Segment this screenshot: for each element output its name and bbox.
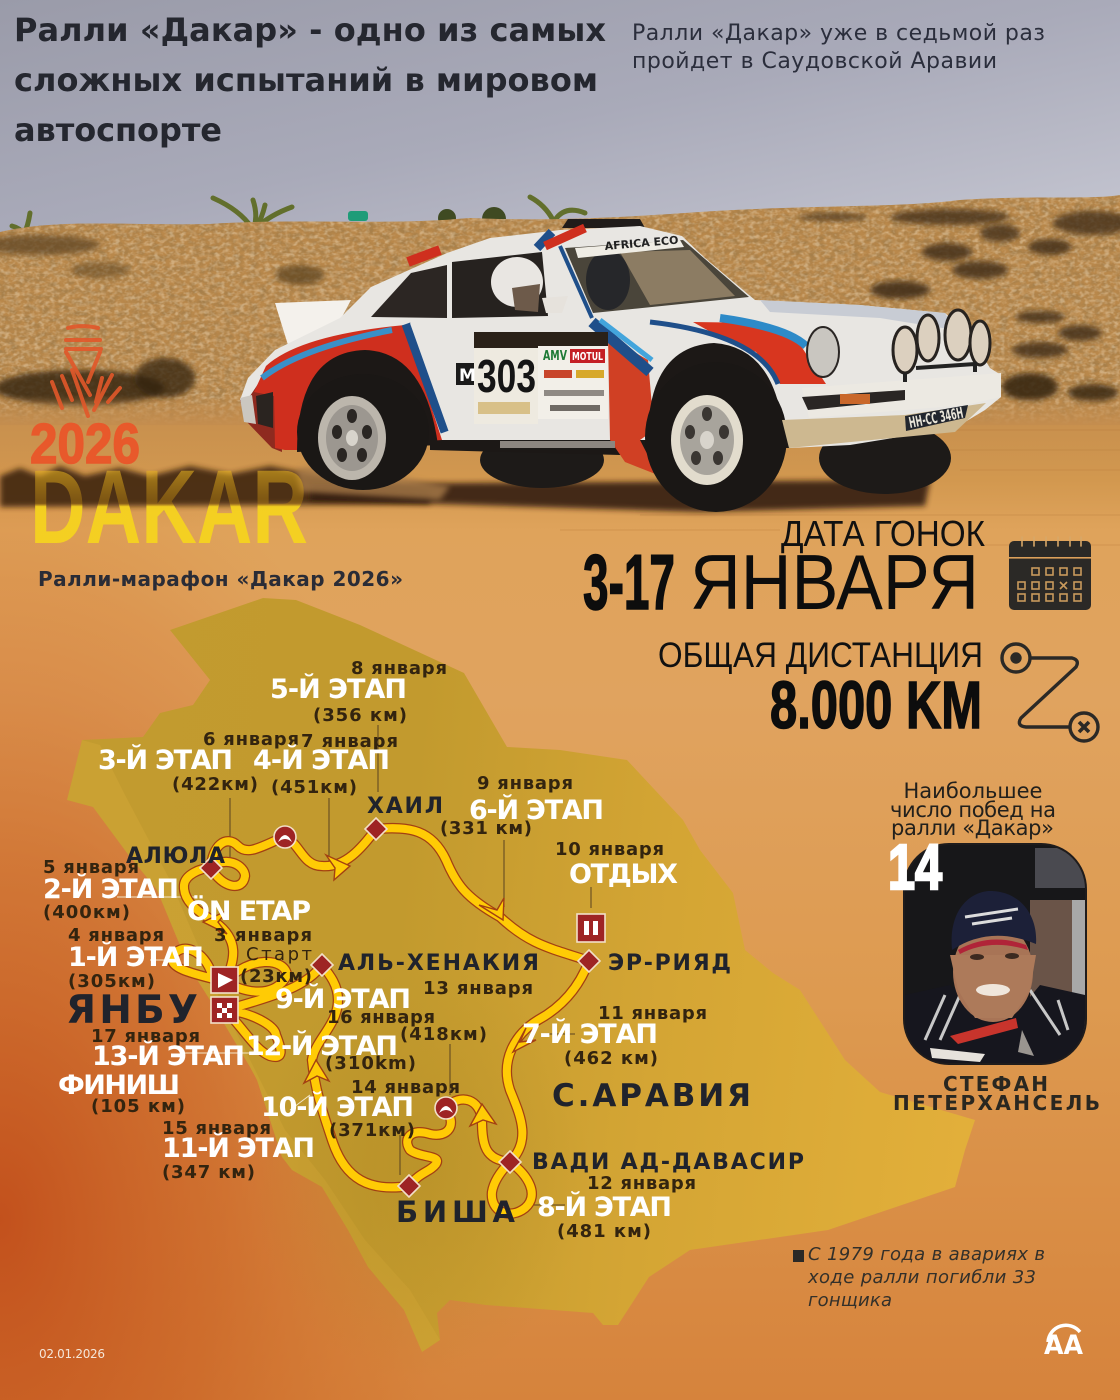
- stage 9 label: 9-Й ЭТАП: [275, 983, 411, 1015]
- Dakar 2026 logo: [30, 326, 308, 566]
- headlight: [807, 327, 839, 377]
- dark brush and shadow band behind the logo: [0, 466, 430, 507]
- note about fatalities: [793, 1244, 1045, 1311]
- stage 4 label: 7 января: [301, 731, 398, 752]
- wheel arches: [297, 350, 438, 452]
- stage 4 label: [253, 731, 398, 798]
- stage 11 label: [162, 1118, 315, 1183]
- title: автоспорте: [14, 111, 222, 149]
- city labels: ЭР-РИЯД: [608, 951, 731, 976]
- most wins caption: ралли «Дакар»: [891, 816, 1054, 840]
- stage 9 label: 13 января: [423, 978, 533, 999]
- total distance: ОБЩАЯ ДИСТАНЦИЯ: [658, 636, 983, 675]
- city labels: ЯНБУ: [66, 988, 198, 1033]
- rest day label: [555, 839, 678, 890]
- stage 6 label: 9 января: [477, 773, 573, 794]
- city labels: [66, 794, 804, 1229]
- stage 7 label: (462 км): [564, 1048, 658, 1069]
- bumper and apron: [802, 373, 1001, 418]
- map of Saudi Arabia: [67, 598, 975, 1380]
- stage 1 label: 4 января: [68, 925, 164, 946]
- stage 8 label: [537, 1173, 696, 1242]
- sand colour overlay: [0, 440, 1120, 1400]
- finish icon: [211, 997, 238, 1023]
- windows: [371, 265, 447, 318]
- stage 6 label: [440, 773, 604, 839]
- total distance: 8.000 KM: [770, 668, 982, 743]
- agency logo: AA: [1044, 1330, 1083, 1361]
- stage 4 label: 4-Й ЭТАП: [253, 744, 390, 776]
- caption: rally marathon: Ралли-марафон «Дакар 2026»: [38, 567, 403, 591]
- number of wins: 14: [888, 831, 942, 903]
- stage 8 label: (481 км): [557, 1221, 651, 1242]
- stage 3 label: 6 января: [203, 729, 299, 750]
- prologue label: ÖN ETAP: [187, 894, 311, 927]
- stage 4 label: (451км): [271, 777, 357, 798]
- driver name: СТЕФАН: [943, 1072, 1048, 1096]
- race dates: ЯНВАРЯ: [690, 538, 979, 626]
- stage 10 label: 10-Й ЭТАП: [261, 1091, 414, 1123]
- stage 2 label: (400км): [43, 902, 130, 923]
- red paint panels: [254, 325, 442, 450]
- city labels: ХАИЛ: [367, 794, 443, 819]
- stage 13 finish label: (105 км): [91, 1096, 185, 1117]
- rest icon: [577, 914, 605, 942]
- Dakar 2026 logo: 2026: [30, 412, 140, 476]
- driver name: ПЕТЕРХАНСЕЛЬ: [893, 1091, 1100, 1115]
- title: Ралли «Дакар» - одно из самых: [14, 11, 606, 49]
- route line: [172, 828, 589, 1214]
- rally car photo illustration: [240, 219, 1001, 512]
- most wins caption: [890, 779, 1056, 840]
- stage 13 finish label: [58, 1026, 245, 1117]
- stage nodes: [200, 818, 600, 1197]
- leader lines: [117, 725, 591, 1205]
- stage 5 label: (356 км): [313, 705, 407, 726]
- logo: tribal head emblem: [52, 326, 120, 416]
- front wheel: [645, 362, 787, 512]
- stage 7 label: 11 января: [598, 1003, 707, 1024]
- start icon: [211, 967, 238, 993]
- race number panels: MOTUL: [572, 350, 603, 363]
- subtitle: пройдет в Саудовской Аравии: [632, 49, 997, 74]
- stage 12 label: 16 января: [327, 1007, 435, 1028]
- note about fatalities: ходе ралли погибли 33: [807, 1267, 1036, 1288]
- stage 3 label: (422км): [172, 774, 258, 795]
- race number panels: M: [459, 366, 476, 386]
- rally car photo illustration: AFRICA ECO: [604, 234, 679, 253]
- icon: calendar: [1009, 537, 1091, 610]
- rally car photo illustration: HH-CC 346H: [907, 404, 965, 432]
- Dakar 2026 logo: DAKAR: [30, 449, 308, 566]
- stage 11 label: 15 января: [162, 1118, 271, 1139]
- race number panels: 303: [477, 350, 536, 402]
- stage 10 label: (371км): [329, 1120, 415, 1141]
- stage 10 label: 14 января: [351, 1077, 460, 1098]
- underbody: [430, 440, 790, 455]
- stage 11 label: (347 км): [162, 1162, 255, 1183]
- city labels: С.АРАВИЯ: [552, 1078, 751, 1114]
- stage 6 label: (331 км): [440, 818, 532, 839]
- race number panels: [456, 332, 608, 424]
- note about fatalities: гонщика: [808, 1290, 892, 1311]
- rear wheel: [297, 374, 429, 490]
- stage 8 label: 8-Й ЭТАП: [537, 1191, 672, 1223]
- prologue label: Старт: [246, 944, 312, 965]
- stage 1 label: (305км): [68, 971, 155, 992]
- stage 9 label: (418км): [400, 1024, 487, 1045]
- stage 11 label: 11-Й ЭТАП: [162, 1132, 315, 1164]
- prologue label: [187, 894, 312, 987]
- stage 3 label: [98, 729, 299, 795]
- race dates: 3-17: [583, 538, 675, 626]
- stage 5 label: [270, 658, 447, 726]
- driver portrait: [903, 843, 1087, 1065]
- rest day label: 10 января: [555, 839, 664, 860]
- race dates: [583, 513, 985, 626]
- driver name: [893, 1072, 1100, 1115]
- stage 10 label: [261, 1077, 460, 1141]
- stage 5 label: 8 января: [351, 658, 447, 679]
- stage 13 finish label: 13-Й ЭТАП: [92, 1040, 245, 1072]
- prologue label: (23км): [240, 966, 312, 987]
- most wins caption: Наибольшее: [904, 779, 1042, 803]
- title: [14, 11, 606, 149]
- stage 5 label: 5-Й ЭТАП: [270, 673, 407, 705]
- city labels: ВАДИ АД-ДАВАСИР: [532, 1150, 804, 1175]
- stage 8 label: 12 января: [587, 1173, 696, 1194]
- far wheels: [480, 422, 951, 494]
- rear bumper: [240, 395, 256, 424]
- stage 2 label: [43, 857, 179, 923]
- most wins caption: число побед на: [890, 798, 1056, 822]
- city labels: БИША: [396, 1195, 516, 1229]
- stage 6 label: 6-Й ЭТАП: [469, 794, 604, 826]
- note about fatalities: С 1979 года в авариях в: [808, 1244, 1045, 1265]
- route arrows: [203, 855, 536, 1126]
- city labels: АЛЬ-ХЕНАКИЯ: [338, 951, 539, 976]
- stage 13 finish label: ФИНИШ: [58, 1070, 180, 1101]
- title: сложных испытаний в мировом: [14, 61, 598, 99]
- icon: route: [1002, 644, 1098, 741]
- stage 1 label: [68, 925, 204, 992]
- city labels: АЛЮЛА: [126, 844, 225, 869]
- total distance: [658, 636, 983, 743]
- palm trees and bushes on the horizon: [12, 197, 585, 234]
- sky background: [0, 0, 1120, 240]
- rocky dune behind the car: [0, 190, 1120, 425]
- prologue label: 3 января: [214, 925, 312, 946]
- sand streaks: [560, 430, 1120, 545]
- stage 12 label: 12-Й ЭТАП: [246, 1030, 398, 1062]
- stage 7 label: 7-Й ЭТАП: [522, 1018, 658, 1050]
- stage 13 finish label: 17 января: [91, 1026, 200, 1047]
- stage 7 label: [522, 1003, 707, 1069]
- rest day label: ОТДЫХ: [569, 859, 678, 890]
- car body: [240, 226, 1001, 448]
- subtitle: [632, 21, 1045, 74]
- subtitle: Ралли «Дакар» уже в седьмой раз: [632, 21, 1045, 46]
- blue racing stripes: [262, 228, 806, 432]
- stage 2 label: 2-Й ЭТАП: [43, 873, 179, 905]
- sill: [500, 441, 615, 448]
- race dates: ДАТА ГОНОК: [781, 513, 985, 554]
- stage 2 label: 5 января: [43, 857, 139, 878]
- stage 9 label: [275, 978, 533, 1045]
- spot lights: [893, 310, 990, 373]
- race number panels: AMV: [543, 349, 567, 364]
- stage 12 label: [246, 1007, 435, 1074]
- date stamp: 02.01.2026: [39, 1347, 105, 1361]
- stage 12 label: (310km): [325, 1053, 416, 1074]
- stage 3 label: 3-Й ЭТАП: [98, 744, 233, 776]
- sand background: [0, 400, 1120, 1400]
- stage 1 label: 1-Й ЭТАП: [68, 941, 204, 973]
